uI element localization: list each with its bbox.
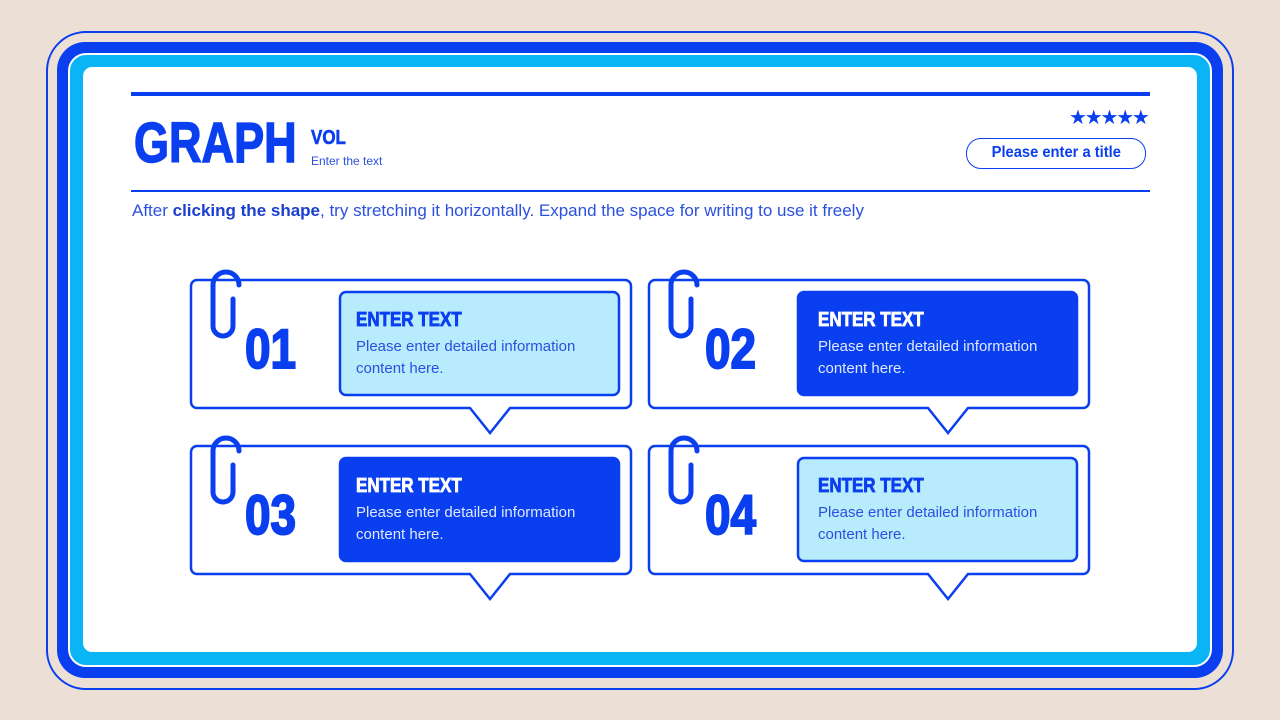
card 03: content here.	[356, 526, 444, 543]
card 03	[191, 438, 631, 599]
stars: ★★★★★	[1069, 107, 1148, 129]
card 01: content here.	[356, 360, 444, 377]
card 01: 01	[245, 318, 296, 380]
cyan band	[68, 53, 1212, 667]
card 03: Please enter detailed information	[356, 504, 575, 521]
card 02: 02	[705, 318, 756, 380]
divider	[131, 190, 1150, 192]
card 04: ENTER TEXT	[818, 474, 924, 496]
subtitle text: Enter the text	[311, 154, 382, 168]
card 04: Please enter detailed information	[818, 504, 1037, 521]
card 01: ENTER TEXT	[356, 308, 462, 330]
card 04: content here.	[818, 526, 906, 543]
card 02	[649, 272, 1089, 433]
title pill	[966, 138, 1146, 169]
title pill: Please enter a title	[991, 144, 1121, 161]
card 02: ENTER TEXT	[818, 308, 924, 330]
white panel	[83, 67, 1197, 652]
card 02: Please enter detailed information	[818, 338, 1037, 355]
card 02: content here.	[818, 360, 906, 377]
card 03: ENTER TEXT	[356, 474, 462, 496]
card 01: Please enter detailed information	[356, 338, 575, 355]
top rule	[131, 92, 1150, 96]
card 03: 03	[245, 484, 296, 546]
card 01	[191, 272, 631, 433]
subtitle VOL: VOL	[311, 127, 346, 149]
card 04: 04	[705, 484, 757, 546]
card 04	[649, 438, 1089, 599]
instruction text: After clicking the shape, try stretching it horizontally. Expand the space for writing to use it freely	[132, 201, 864, 220]
title GRAPH: GRAPH	[134, 111, 297, 175]
